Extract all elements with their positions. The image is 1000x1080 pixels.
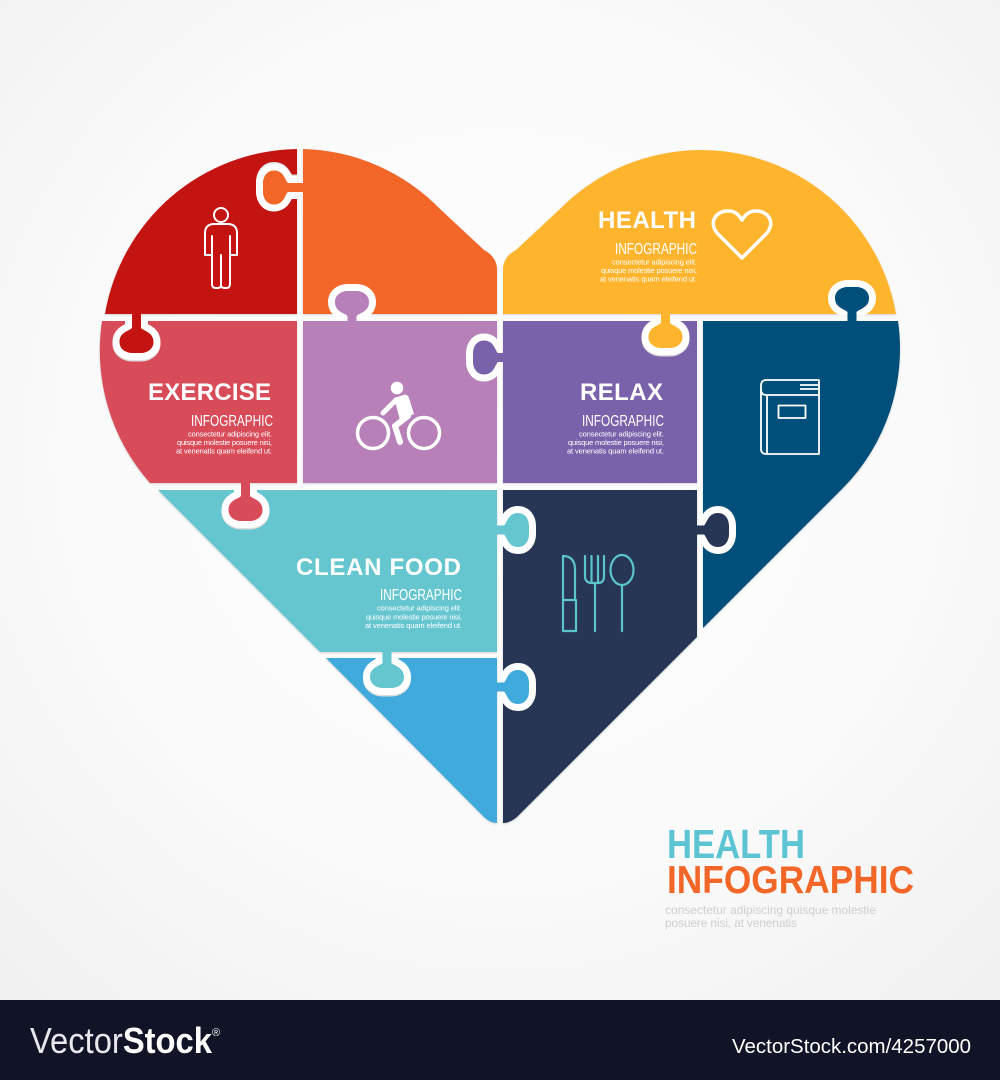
label: health: HEALTH [598,207,696,234]
label: relax: RELAX [580,379,663,406]
puzzle knob: purple into lilac [473,340,504,374]
puzzle knob: yellow into purple [648,313,682,350]
puzzle knob: lilac into orange [335,291,369,322]
piece: navy blue [703,321,900,628]
piece: orange [303,149,497,314]
label: exercise: quisque molestie posuere nisi, [177,438,272,447]
title block: INFOGRAPHIC [667,859,914,902]
footer bar [0,1000,1000,1080]
heart puzzle [100,149,900,823]
label: health: consectetur adipiscing elit. [612,258,697,266]
title block: posuere nisi, at venenatis [665,916,797,930]
label: health: INFOGRAPHIC [615,241,697,258]
title block: consectetur adipiscing quisque molestie [665,903,876,917]
piece: sky blue [326,658,497,823]
puzzle knob: orange into red [263,169,304,204]
piece: red [105,149,297,314]
footer logo: VectorStock [30,1020,213,1061]
piece: yellow [503,150,896,314]
icon: person [205,208,237,288]
label: clean food: CLEAN FOOD [296,554,461,581]
piece: dark navy [503,490,697,823]
label: relax [567,379,664,456]
piece: purple [503,321,697,483]
label: exercise [148,379,273,456]
puzzle knob: teal into sky blue [370,651,404,690]
label: relax: consectetur adipiscing elit. [579,430,664,438]
label: clean food: quisque molestie posuere nisi, [366,612,462,622]
label: clean food: at venenatis quam eleifend ut. [365,621,462,630]
registered mark: ® [212,1027,220,1039]
icon: book [761,380,819,454]
puzzle knob: rose into teal [228,483,262,522]
icon: bicycle rider [358,382,440,448]
label: relax: quisque molestie posuere nisi, [568,438,664,447]
title block: HEALTH [667,821,805,867]
label: health: quisque molestie posuere nisi, [601,266,697,275]
label: health [598,207,697,284]
piece: lilac [303,321,497,483]
piece: teal [158,490,497,652]
title block [665,821,914,930]
label: exercise: consectetur adipiscing elit. [188,430,272,438]
label: clean food [296,554,462,630]
puzzle knob: sky blue into dark navy [496,670,529,704]
label: clean food: consectetur adipiscing elit. [377,604,462,612]
icon: outline heart [713,211,771,258]
footer url: VectorStock.com/4257000 [732,1036,971,1058]
puzzle knob: navy into yellow [835,287,869,322]
puzzle knob: red into rose [120,313,154,354]
icon: cutlery [563,555,634,631]
piece: rose [100,321,297,483]
label: relax: INFOGRAPHIC [582,413,664,430]
label: clean food: INFOGRAPHIC [380,587,462,604]
label: exercise: EXERCISE [148,379,271,406]
label: relax: at venenatis quam eleifend ut. [567,446,664,456]
puzzle knob: dark navy into navy [696,513,729,547]
puzzle pieces [100,149,900,823]
puzzle knob: teal into dark navy [496,513,529,547]
label: exercise: INFOGRAPHIC [191,413,273,430]
label: exercise: at venenatis quam eleifend ut. [176,446,272,456]
label: health: at venenatis quam eleifend ut. [600,274,697,284]
